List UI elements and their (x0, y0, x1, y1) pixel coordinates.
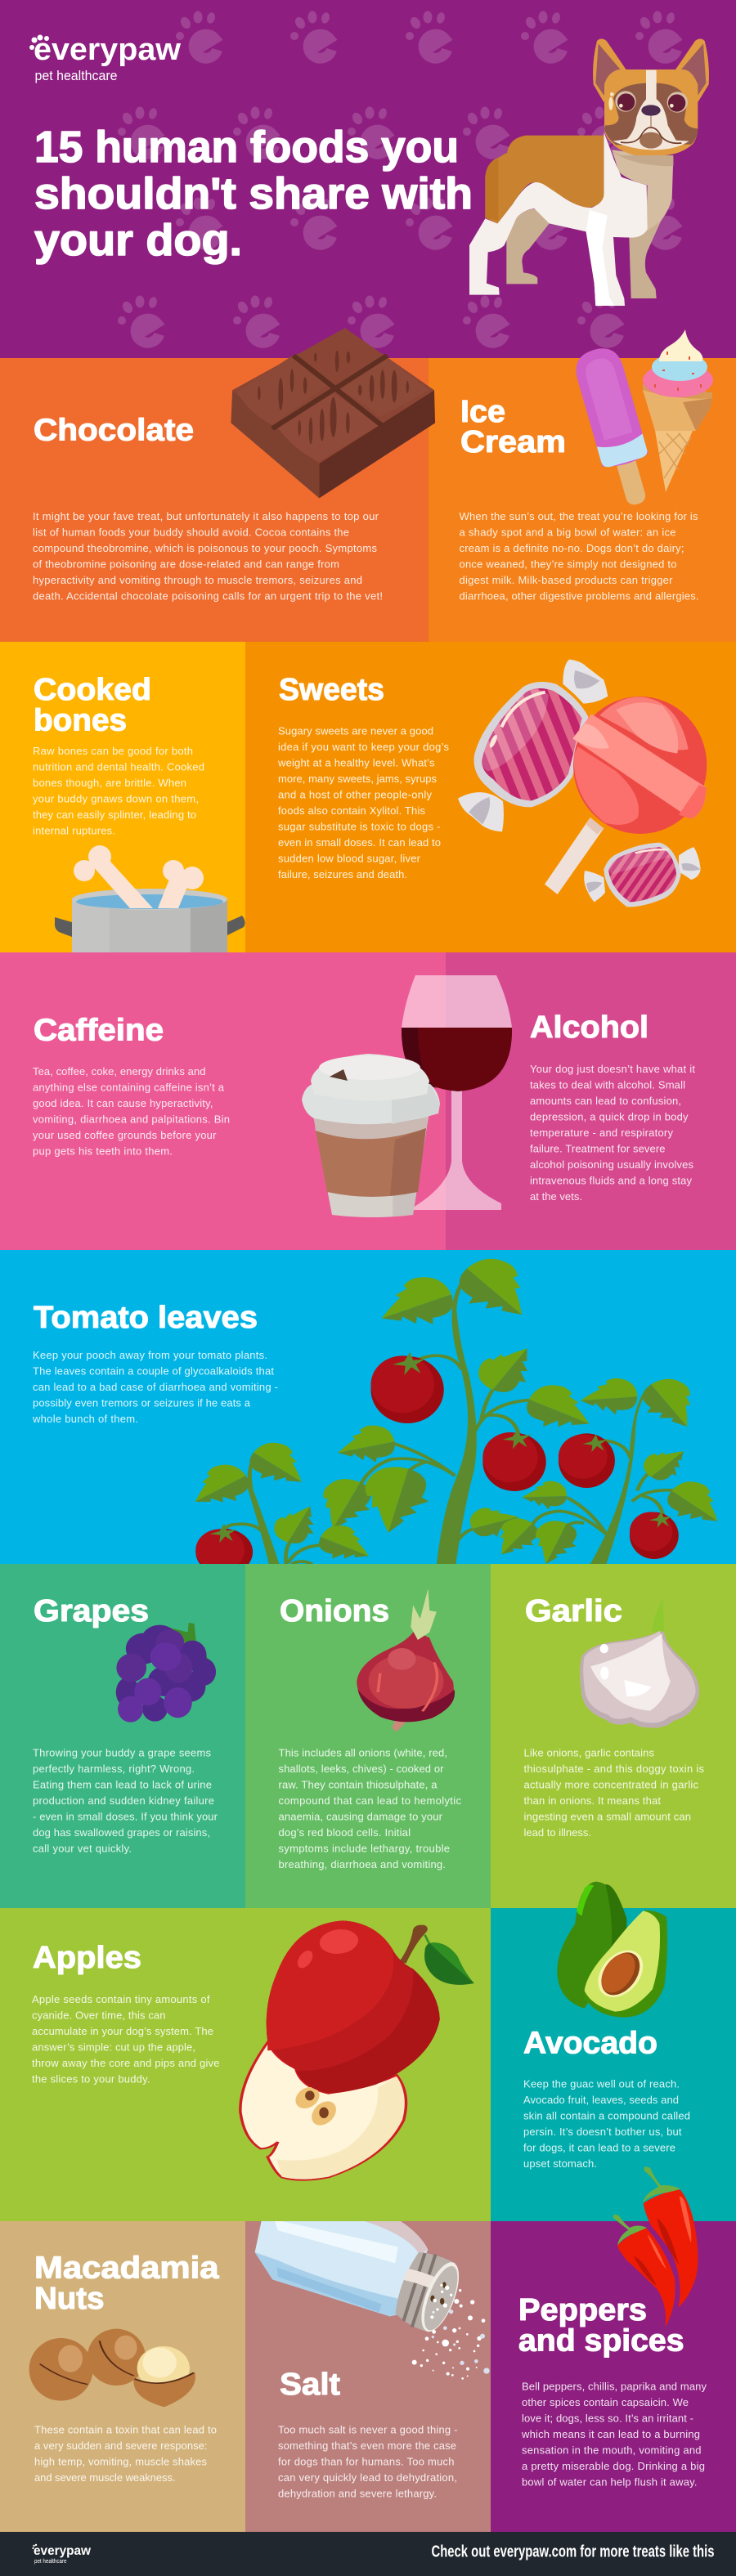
text: cooked bones body: they can easily splinter, leading to (33, 809, 196, 821)
heading: tomato leaves: Tomato leaves (34, 1301, 258, 1335)
text: tomato leaves body: can lead to a bad case of diarrhoea and vomiting - (33, 1381, 278, 1393)
text: salt body: Too much salt is never a good thing - (278, 2423, 458, 2436)
text: ice cream body: When the sun’s out, the treat you’re looking for is (460, 510, 698, 522)
text: caffeine body: good idea. It can cause hyperactivity, (33, 1097, 213, 1109)
panel: chocolate (0, 358, 429, 642)
heading: macadamia nuts: Macadamia (34, 2251, 219, 2286)
text: onions body: breathing, diarrhoea and vomiting. (278, 1858, 446, 1870)
text: ice cream body: a shady spot and a big bowl of water: an ice (460, 526, 675, 538)
text: macadamia nuts body: a very sudden and severe response: (34, 2439, 208, 2452)
text: chocolate body: of theobromine poisoning are dose-related and can range from (33, 558, 339, 571)
icon: tomato plants (195, 1259, 718, 1564)
text: ice cream body: digest milk. Milk-based products can trigger (460, 574, 673, 586)
text: peppers and spices body: Bell peppers, chillis, paprika and many (522, 2381, 707, 2392)
icon: macadamia nuts (29, 2329, 195, 2407)
text: alcohol body: takes to deal with alcohol. Small (530, 1079, 685, 1091)
heading: ice cream: Cream (460, 425, 566, 459)
text: peppers and spices body: other spices contain capsaicin. We (522, 2396, 689, 2408)
text: ice cream body: once weaned, they’re simply not designed to (460, 558, 677, 571)
text: grapes body: production and sudden kidney failure (33, 1794, 214, 1807)
text: grapes body: call your vet quickly. (33, 1843, 132, 1854)
logo: footer everypaw (32, 2544, 92, 2565)
text: peppers and spices body: a pretty miserable dog. Drinking a big (522, 2460, 705, 2472)
text: tomato leaves body: The leaves contain a couple of glycoalkaloids that (33, 1365, 274, 1377)
title (34, 123, 473, 265)
panel: apples (0, 1908, 491, 2221)
heading: peppers and spices: and spices (518, 2323, 684, 2358)
footer (0, 2532, 736, 2576)
heading: ice cream: Ice (460, 395, 505, 429)
text: garlic body (523, 1746, 705, 1839)
heading: macadamia nuts (34, 2251, 219, 2316)
heading: chocolate: Chocolate (34, 414, 194, 448)
panel: header background with paw pattern (0, 0, 736, 358)
heading: peppers and spices: Peppers (518, 2293, 647, 2327)
text: garlic body: Like onions, garlic contains (523, 1746, 654, 1759)
text: onions body: raw. They contain thiosulphate, a (278, 1779, 438, 1790)
text: chocolate body (33, 510, 383, 602)
text: apples body: accumulate in your dog’s system. The (32, 2025, 213, 2037)
text: cooked bones body: internal ruptures. (33, 824, 115, 837)
text: caffeine body: pup gets his teeth into them. (33, 1145, 173, 1158)
logo: everypaw pet healthcare (29, 33, 181, 83)
text: garlic body: ingesting even a small amount can (523, 1810, 691, 1823)
text: ice cream body: cream is a definite no-no. Dogs don’t do dairy; (460, 542, 684, 554)
text: macadamia nuts body (34, 2423, 217, 2484)
panel: macadamia nuts (0, 2221, 245, 2532)
icon: garlic (580, 1598, 699, 1728)
text: peppers and spices body (521, 2381, 707, 2489)
icon: ice cream cone (643, 329, 713, 492)
text: peppers and spices body: bowl of water can help flush it away. (522, 2475, 697, 2489)
text: salt body: for dogs than for humans. Too much (278, 2456, 455, 2467)
text: chocolate body: compound theobromine, which is poisonous to your pooch. Symptoms (33, 542, 378, 554)
text: alcohol body: Your dog just doesn’t have what it (530, 1063, 695, 1075)
text: sweets body (277, 724, 450, 880)
text: tomato leaves body: Keep your pooch away from your tomato plants. (33, 1349, 267, 1361)
panel: sweets (245, 642, 736, 952)
text: sweets body: Sugary sweets are never a good (278, 724, 433, 737)
text: sweets body: even in small doses. It can lead to (278, 836, 441, 849)
heading: caffeine: Caffeine (34, 1014, 164, 1048)
text: onions body: symptoms include lethargy, trouble (278, 1843, 450, 1854)
panel: salt (245, 2221, 491, 2532)
text: salt body: something that’s even more the case (278, 2439, 456, 2452)
heading: grapes: Grapes (34, 1594, 149, 1628)
text: alcohol body: at the vets. (530, 1190, 582, 1203)
text: avocado body: skin all contain a compound called (523, 2109, 690, 2122)
panel: alcohol (446, 952, 736, 1250)
text: peppers and spices body: love it; dogs, less so. It’s an irritant - (522, 2412, 693, 2425)
text: grapes body: - even in small doses. If you think your (33, 1810, 218, 1823)
text: chocolate body: hyperactivity and vomiting through to muscle tremors, seizures and (33, 574, 362, 586)
panel: onions (245, 1564, 491, 1908)
text: onions body: compound that can lead to hemolytic (278, 1794, 461, 1807)
heading: onions: Onions (280, 1594, 389, 1628)
icon: sweets and lollipop (458, 660, 707, 907)
heading: alcohol: Alcohol (530, 1010, 648, 1045)
text: onions body: anaemia, causing damage to your (278, 1810, 443, 1823)
text: macadamia nuts body: and severe muscle weakness. (34, 2471, 175, 2484)
text: sweets body: foods also contain Xylitol. This (278, 804, 425, 817)
heading: cooked bones (34, 673, 151, 737)
heading: ice cream (460, 395, 566, 459)
text: garlic body: than in onions. It means that (523, 1794, 661, 1807)
text: chocolate body: It might be your fave treat, but unfortunately it also happens to top our (33, 510, 379, 522)
heading: macadamia nuts: Nuts (34, 2282, 105, 2316)
text: peppers and spices body: sensation in the mouth, vomiting and (522, 2444, 702, 2456)
panel: grapes (0, 1564, 245, 1908)
icon: pot with bones (55, 845, 245, 955)
text: caffeine body: your used coffee grounds before your (33, 1129, 217, 1141)
text: avocado body: persin. It’s doesn’t bother us, but (523, 2126, 682, 2138)
text: tomato leaves body: possibly even tremors or seizures if he eats a (33, 1396, 251, 1409)
text: tomato leaves body (32, 1349, 278, 1425)
icon: avocado (557, 1882, 667, 2018)
text: apples body (32, 1993, 219, 2085)
logo: everypaw pet healthcare: everypaw (34, 33, 181, 67)
title: 15 human foods you (34, 123, 459, 172)
text: apples body: Apple seeds contain tiny amounts of (32, 1993, 210, 2005)
heading: cooked bones: Cooked (34, 673, 151, 707)
text: onions body: shallots, leeks, chives) - cooked or (278, 1763, 444, 1775)
text: alcohol body: temperature - and respiratory (530, 1127, 674, 1139)
title: your dog. (34, 216, 242, 265)
logo: footer everypaw: everypaw (34, 2544, 92, 2558)
icon: apple (240, 1920, 474, 2180)
text: cooked bones body: bones though, are brittle. When (33, 777, 186, 789)
text: avocado body (523, 2078, 690, 2170)
text: salt body: can very quickly lead to dehydration, (278, 2471, 457, 2484)
text: grapes body: perfectly harmless, right? Wrong. (33, 1763, 195, 1775)
text: salt body: dehydration and severe lethargy. (278, 2487, 437, 2500)
text: sweets body: weight at a healthy level. What’s (277, 757, 435, 768)
text: peppers and spices body: which means it can lead to a burning (521, 2428, 700, 2440)
panel: garlic (491, 1564, 736, 1908)
logo: footer everypaw: pet healthcare (34, 2559, 67, 2565)
text: onions body: dog’s red blood cells. Initial (278, 1826, 411, 1839)
text: apples body: answer’s simple: cut up the apple, (32, 2041, 195, 2054)
text: avocado body: Keep the guac well out of reach. (523, 2078, 680, 2090)
title: shouldn't share with (34, 169, 473, 218)
text: grapes body (33, 1746, 218, 1854)
text: alcohol body: depression, a quick drop in body (530, 1110, 689, 1123)
text: alcohol body: alcohol poisoning usually involves (530, 1158, 693, 1171)
text: ice cream body: diarrhoea, other digestive problems and allergies. (460, 590, 698, 602)
panel: ice cream (429, 358, 736, 642)
panel: tomato leaves (0, 1250, 736, 1564)
text: avocado body: for dogs, it can lead to a severe (523, 2142, 675, 2153)
text: avocado body: Avocado fruit, leaves, seeds and (523, 2094, 679, 2106)
text: sweets body: and a host of other people-only (278, 788, 432, 801)
text: alcohol body: failure. Treatment for severe (530, 1143, 666, 1154)
heading: sweets: Sweets (279, 673, 384, 707)
heading: salt: Salt (280, 2368, 340, 2402)
text: salt body (278, 2423, 458, 2500)
logo: everypaw pet healthcare: pet healthcare (34, 68, 118, 83)
text: caffeine body (33, 1065, 230, 1158)
text: avocado body: upset stomach. (523, 2157, 597, 2170)
icon: chilli peppers (613, 2166, 698, 2327)
heading: avocado: Avocado (523, 2026, 657, 2060)
text: alcohol body: amounts can lead to confusion, (530, 1095, 681, 1107)
panel: avocado (491, 1908, 736, 2221)
panel: peppers and spices (491, 2221, 736, 2532)
panel: cooked bones (0, 642, 245, 952)
text: cooked bones body (33, 745, 204, 837)
icon: onion (357, 1588, 455, 1732)
text: onions body: This includes all onions (white, red, (278, 1746, 447, 1759)
text: apples body: the slices to your buddy. (32, 2073, 150, 2085)
text: macadamia nuts body: These contain a toxin that can lead to (34, 2423, 217, 2436)
icon: salt shaker (255, 2220, 490, 2380)
text: chocolate body: death. Accidental chocolate poisoning calls for an urgent trip to the vet! (33, 590, 383, 602)
text: garlic body: thiosulphate - and this doggy toxin is (523, 1763, 705, 1775)
icon: wine glass (402, 975, 512, 1210)
text: alcohol body (530, 1063, 695, 1203)
text: cooked bones body: nutrition and dental health. Cooked (33, 760, 204, 773)
heading: apples: Apples (33, 1941, 141, 1975)
text: sweets body: idea if you want to keep your dog’s (278, 741, 450, 753)
text: garlic body: actually more concentrated in garlic (523, 1779, 698, 1790)
text: onions body (278, 1746, 461, 1870)
icon: chocolate bar (231, 328, 435, 498)
text: tomato leaves body: whole bunch of them. (32, 1413, 138, 1425)
text: sweets body: sugar substitute is toxic to dogs - (278, 821, 440, 832)
panel: caffeine (0, 952, 446, 1250)
text: caffeine body: anything else containing caffeine isn’t a (33, 1081, 225, 1094)
text: sweets body: more, many sweets, jams, syrups (278, 773, 437, 785)
heading: cooked bones: bones (34, 703, 127, 737)
text: grapes body: Throwing your buddy a grape seems (33, 1746, 211, 1759)
text: apples body: cyanide. Over time, this can (32, 2009, 165, 2021)
heading: garlic: Garlic (525, 1594, 622, 1628)
text: cooked bones body: Raw bones can be good for both (33, 745, 193, 757)
text: chocolate body: list of human foods your buddy should avoid. Cocoa contains the (33, 526, 349, 538)
text: cooked bones body: your buddy gnaws down on them, (33, 793, 199, 804)
text: caffeine body: vomiting, diarrhoea and palpitations. Bin (33, 1113, 230, 1125)
text: sweets body: sudden low blood sugar, liver (278, 852, 421, 865)
text: grapes body: dog has swallowed grapes or raisins, (33, 1826, 210, 1839)
text: ice cream body (460, 510, 698, 602)
text: sweets body: failure, seizures and death. (278, 868, 407, 880)
icon: coffee cup (302, 1054, 440, 1217)
icon: french bulldog (469, 39, 709, 306)
icon: grapes (116, 1623, 216, 1723)
heading: peppers and spices (518, 2293, 684, 2358)
text: macadamia nuts body: high temp, vomiting, muscle shakes (34, 2456, 208, 2467)
text: alcohol body: intravenous fluids and a long stay (530, 1174, 692, 1187)
text: garlic body: lead to illness. (523, 1826, 591, 1839)
text: apples body: throw away the core and pips and give (32, 2057, 219, 2069)
text: grapes body: Eating them can lead to lack of urine (33, 1779, 212, 1790)
text: caffeine body: Tea, coffee, coke, energy drinks and (33, 1065, 206, 1077)
icon: popsicle (571, 343, 661, 510)
